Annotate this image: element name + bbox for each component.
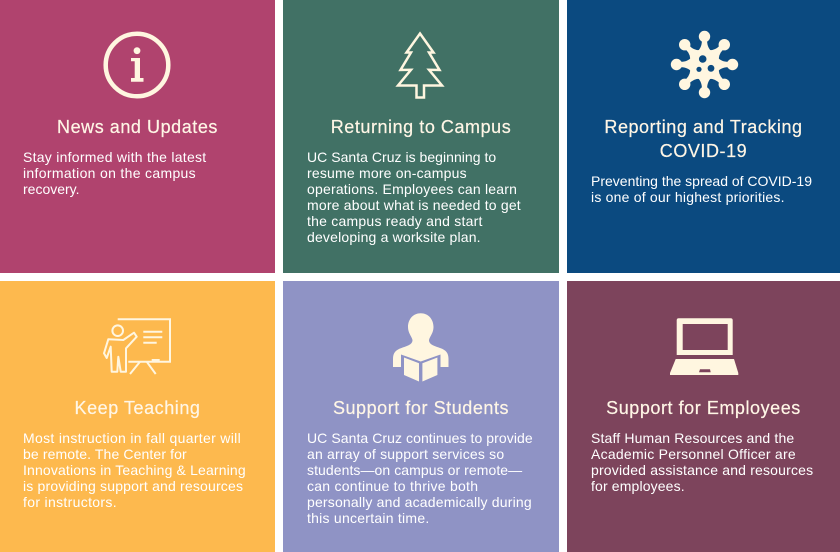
text: students description: an array of support services so [307, 446, 504, 462]
text: employees description: Staff Human Resources and the [591, 430, 794, 446]
text: news description: Stay informed with the latest [23, 149, 206, 165]
heading: support for employees: Support for Employees [606, 398, 801, 418]
heading: news and updates: News and Updates [57, 117, 218, 137]
text: returning description [307, 149, 521, 245]
text: reporting description [591, 173, 812, 205]
icon: virus [670, 30, 738, 98]
text: news description [23, 149, 206, 197]
text: students description [307, 430, 533, 526]
text: employees description [591, 430, 813, 494]
heading: support for students: Support for Students [333, 398, 509, 418]
icon: teacher at whiteboard [103, 318, 171, 375]
icon: student reading book [393, 313, 448, 382]
heading: reporting and tracking covid-19: Reporting and Tracking [604, 117, 803, 137]
icon: pine tree [395, 32, 444, 99]
heading: reporting and tracking covid-19 [604, 117, 803, 161]
heading: reporting and tracking covid-19: COVID-19 [660, 141, 747, 161]
text: students description: students—on campus or remote— [307, 462, 522, 478]
panel: keep teaching [0, 281, 275, 552]
text: teaching description: Most instruction in fall quarter will [23, 430, 241, 446]
text: returning description: resume more on-campus [307, 165, 467, 181]
text: reporting description: Preventing the spread of COVID-19 [591, 173, 812, 189]
text: returning description: the campus ready and start [307, 213, 483, 229]
text: teaching description: be remote. The Center for [23, 446, 187, 462]
heading: keep teaching: Keep Teaching [75, 398, 200, 418]
heading: returning to campus: Returning to Campus [331, 117, 511, 137]
text: news description: recovery. [23, 181, 80, 197]
text: students description: can continue to thrive both [307, 478, 478, 494]
text: teaching description: Innovations in Teaching & Learning [23, 462, 246, 478]
text: teaching description: is providing support and resources [23, 478, 243, 494]
text: reporting description: is one of our highest priorities. [591, 189, 785, 205]
text: employees description: Academic Personnel Officer are [591, 446, 796, 462]
text: news description: information on the campus [23, 165, 196, 181]
text: employees description: provided assistance and resources [591, 462, 813, 478]
text: returning description: developing a worksite plan. [307, 229, 481, 245]
icon: laptop [670, 318, 738, 375]
text: employees description: for employees. [591, 478, 685, 494]
panel: returning to campus [283, 0, 559, 273]
text: returning description: operations. Employees can learn [307, 181, 517, 197]
text: teaching description: for instructors. [23, 494, 117, 510]
panel: reporting and tracking [567, 0, 840, 273]
icon: information circle [103, 32, 171, 98]
text: returning description: UC Santa Cruz is beginning to [307, 149, 496, 165]
panel: support for employees [567, 281, 840, 552]
text: teaching description [23, 430, 246, 510]
text: students description: UC Santa Cruz continues to provide [307, 430, 533, 446]
text: returning description: more about what is needed to get [307, 197, 521, 213]
panel: news and updates [0, 0, 275, 273]
text: students description: this uncertain time. [307, 510, 430, 526]
text: students description: personally and academically during [307, 494, 532, 510]
panel: support for students [283, 281, 559, 552]
